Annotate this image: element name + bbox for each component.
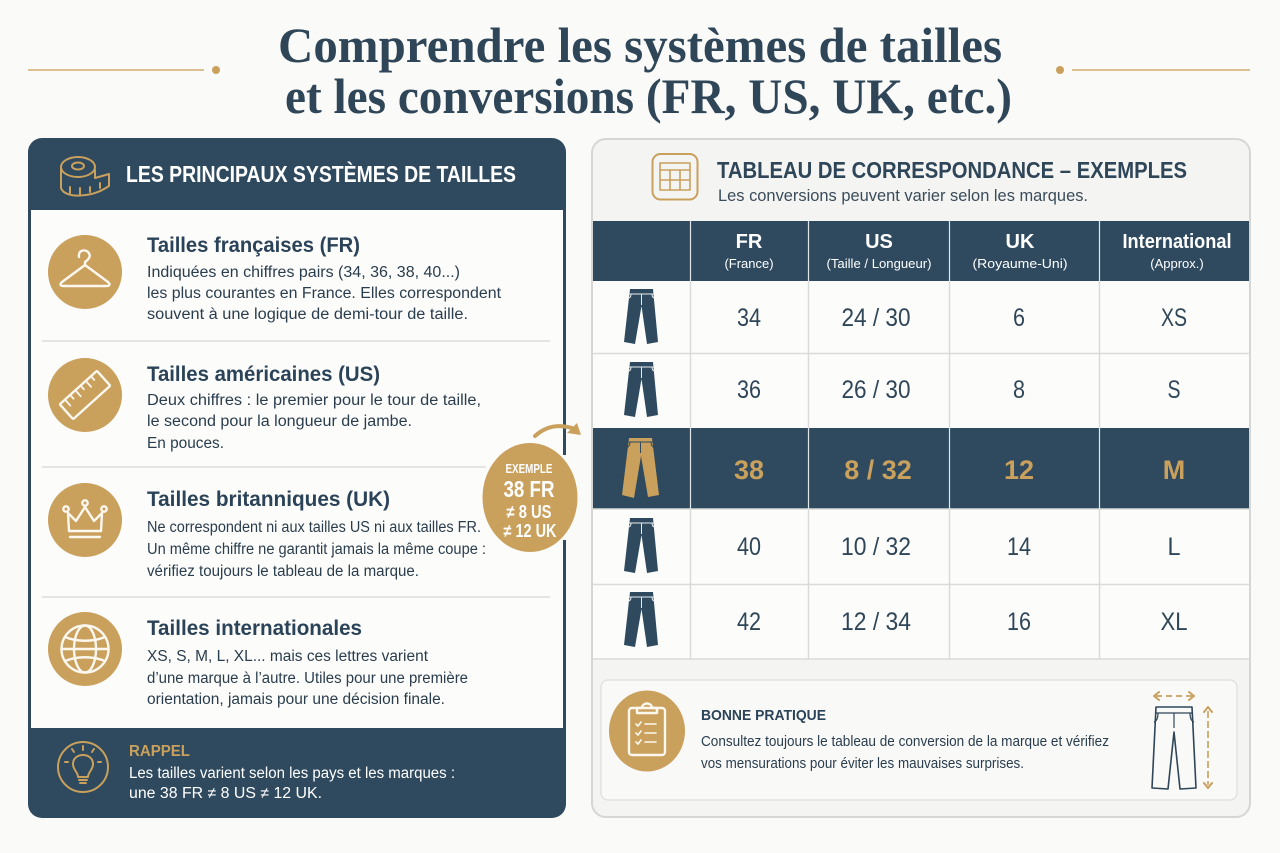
table header: (Royaume-Uni): [972, 256, 1068, 271]
callout: exemple badge: ≠ 8 US: [506, 502, 552, 522]
item: tailles britanniques: vérifiez toujours le tableau de la marque.: [147, 563, 419, 580]
row: 40: [624, 518, 1181, 573]
callout: bonne pratique: BONNE PRATIQUE: [701, 707, 826, 724]
icon: jeans: [624, 592, 658, 647]
callout: rappel: Les tailles varient selon les pays et les marques :: [129, 765, 455, 782]
row: 36: 26 / 30: [842, 376, 910, 404]
row: 42: 12 / 34: [841, 608, 911, 636]
item: tailles américaines: Tailles américaines (US): [147, 363, 380, 386]
item: tailles françaises: les plus courantes en France. Elles correspondent: [147, 285, 502, 302]
title: et les conversions (FR, US, UK, etc.): [285, 68, 1012, 124]
callout: exemple badge: EXEMPLE: [506, 462, 552, 476]
item: tailles britanniques: [48, 483, 486, 580]
icon: gold jeans: [622, 438, 659, 498]
item: tailles internationales: XS, S, M, L, XL... mais ces lettres varient: [147, 648, 429, 665]
item: tailles françaises: souvent à une logique de demi-tour de taille.: [147, 306, 468, 323]
icon: crown: [63, 500, 107, 537]
row: 40: 14: [1007, 533, 1031, 561]
table header: US: [865, 231, 893, 253]
callout: exemple badge: 38 FR: [504, 476, 555, 502]
title: Comprendre les systèmes de tailles: [278, 17, 1002, 73]
table header: [724, 231, 1232, 271]
table header: International: [1122, 231, 1232, 253]
row: 42: [624, 592, 1188, 647]
panel: tableau de correspondance: [592, 139, 1250, 817]
row: 36: 8: [1013, 376, 1025, 404]
callout: bonne pratique: [601, 680, 1237, 800]
icon: jeans: [624, 289, 658, 344]
row: 36: S: [1168, 376, 1180, 404]
table header: (France): [724, 256, 774, 271]
item: tailles internationales: Tailles internationales: [147, 617, 362, 640]
item: tailles françaises: Tailles françaises (FR): [147, 234, 360, 257]
row: 38 highlighted: 38: [734, 455, 764, 485]
row: 38 highlighted: M: [1163, 455, 1185, 485]
icon: clipboard: [629, 704, 665, 755]
table header: (Taille / Longueur): [826, 256, 932, 271]
row: 38 highlighted: [622, 438, 1185, 498]
item: tailles américaines: En pouces.: [147, 435, 224, 452]
item: tailles françaises: Indiquées en chiffres pairs (34, 36, 38, 40...): [147, 264, 460, 281]
row: 36: 36: [737, 376, 761, 404]
item: tailles françaises: [48, 234, 502, 323]
callout: rappel: une 38 FR ≠ 8 US ≠ 12 UK.: [129, 785, 322, 802]
subtitle: Les conversions peuvent varier selon les marques.: [718, 187, 1088, 205]
item: tailles américaines: Deux chiffres : le premier pour le tour de taille,: [147, 392, 481, 409]
row: 34: XS: [1161, 304, 1187, 332]
item: tailles internationales: orientation, jamais pour une décision finale.: [147, 691, 445, 708]
row: 42: 16: [1007, 608, 1031, 636]
arrow: badge to highlighted row: [535, 423, 581, 436]
icon: hanger: [61, 250, 109, 286]
item: tailles britanniques: Ne correspondent ni aux tailles US ni aux tailles FR.: [147, 519, 481, 536]
callout: bonne pratique: Consultez toujours le tableau de conversion de la marque et vérifiez: [701, 734, 1109, 750]
heading: tableau: TABLEAU DE CORRESPONDANCE – EXEMPLES: [717, 157, 1187, 183]
callout: exemple badge: ≠ 12 UK: [504, 521, 556, 541]
icon: light bulb: [58, 742, 108, 792]
table header: UK: [1006, 231, 1035, 253]
row: 34: 24 / 30: [842, 304, 910, 332]
row: 38 highlighted: 8 / 32: [844, 455, 912, 485]
row: 40: L: [1168, 533, 1181, 561]
icon: ruler: [60, 371, 110, 419]
item: tailles américaines: [48, 358, 481, 452]
row: 34: [624, 289, 1187, 344]
icon: jeans outline with measures: [1152, 692, 1212, 789]
icon: measuring tape: [61, 157, 109, 196]
callout: bonne pratique: vos mensurations pour éviter les mauvaises surprises.: [701, 756, 1024, 772]
callout: rappel: [58, 742, 455, 802]
item: tailles britanniques: Tailles britanniques (UK): [147, 488, 390, 511]
item: tailles américaines: le second pour la longueur de jambe.: [147, 413, 412, 430]
row: 34: 34: [737, 304, 761, 332]
icon: globe: [62, 626, 108, 672]
icon: jeans: [624, 362, 658, 417]
heading: les principaux systèmes: LES PRINCIPAUX SYSTÈMES DE TAILLES: [126, 160, 516, 187]
table: [593, 221, 1249, 659]
table header: FR: [736, 231, 763, 253]
row: 40: 10 / 32: [841, 533, 911, 561]
item: tailles britanniques: Un même chiffre ne garantit jamais la même coupe :: [147, 541, 486, 558]
row: 34: 6: [1013, 304, 1025, 332]
icon: jeans: [624, 518, 658, 573]
callout: exemple badge: [482, 423, 581, 552]
title: [278, 17, 1012, 124]
icon: table: [652, 154, 698, 200]
row: 42: XL: [1160, 608, 1188, 636]
item: tailles internationales: [48, 612, 468, 708]
row: 42: 42: [737, 608, 761, 636]
panel: principaux systèmes de tailles: [28, 138, 566, 818]
row: 40: 40: [737, 533, 761, 561]
row: 36: [624, 362, 1180, 417]
row: 38 highlighted: 12: [1004, 455, 1034, 485]
item: tailles internationales: d’une marque à l’autre. Utiles pour une première: [147, 670, 468, 687]
table header: (Approx.): [1150, 256, 1204, 271]
callout: rappel: RAPPEL: [129, 743, 190, 760]
